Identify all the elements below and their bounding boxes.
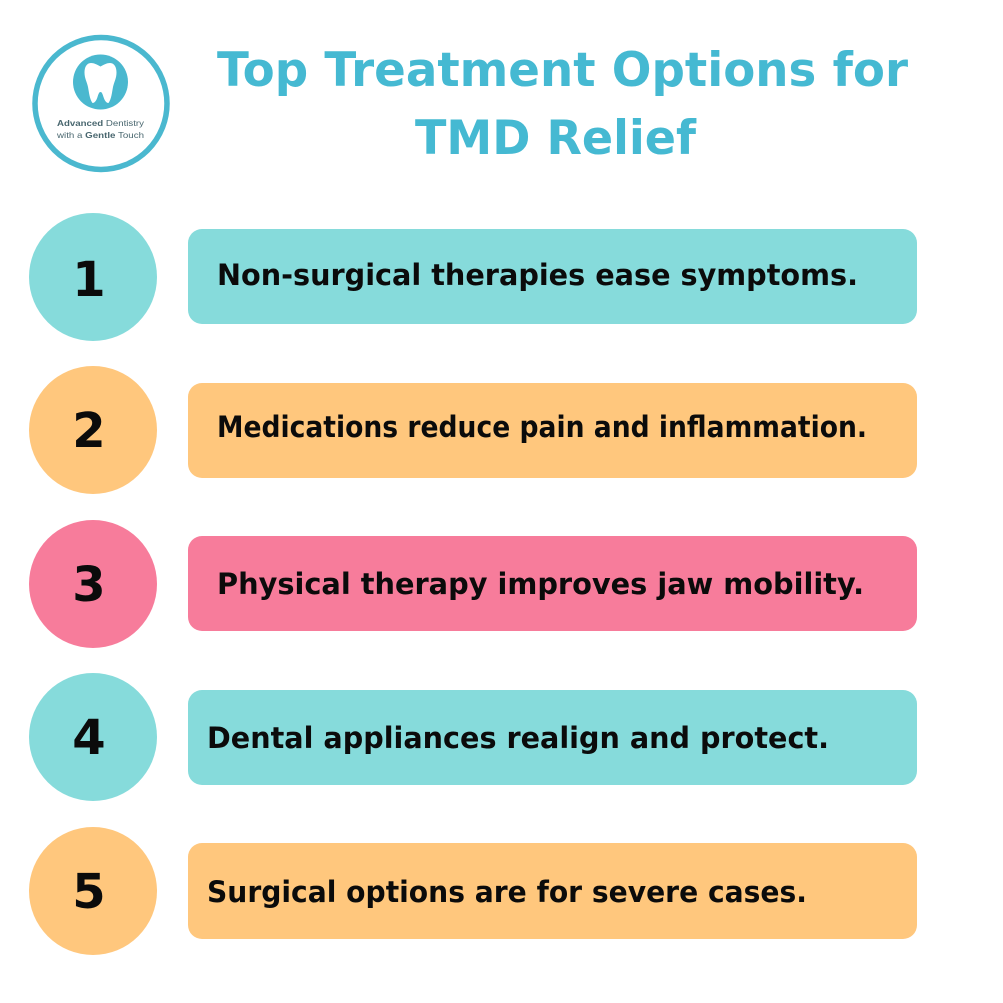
- item 5: [29, 827, 917, 955]
- item 2: 2: [72, 403, 106, 459]
- icon: tooth: [84, 63, 116, 103]
- item 2: [29, 366, 917, 494]
- item 3: [29, 520, 917, 648]
- title: TMD Relief: [415, 111, 697, 166]
- item 4: [29, 673, 917, 801]
- logo text: Advanced Dentistry: [57, 118, 145, 128]
- logo text: [56, 118, 145, 140]
- title: [217, 43, 909, 166]
- title: Top Treatment Options for: [217, 43, 909, 98]
- item 4: Dental appliances realign and protect.: [207, 721, 829, 755]
- item 5: 5: [72, 864, 106, 920]
- item 2: Medications reduce pain and inflammation.: [217, 410, 867, 444]
- item 1: [29, 213, 917, 341]
- item 4: 4: [72, 710, 106, 766]
- item 3: Physical therapy improves jaw mobility.: [217, 567, 864, 601]
- logo: [35, 38, 167, 170]
- item 1: 1: [72, 252, 106, 308]
- logo text: with a Gentle Touch: [56, 130, 144, 140]
- item 3: 3: [72, 557, 106, 613]
- item 5: Surgical options are for severe cases.: [207, 875, 807, 909]
- item 1: Non-surgical therapies ease symptoms.: [217, 258, 858, 292]
